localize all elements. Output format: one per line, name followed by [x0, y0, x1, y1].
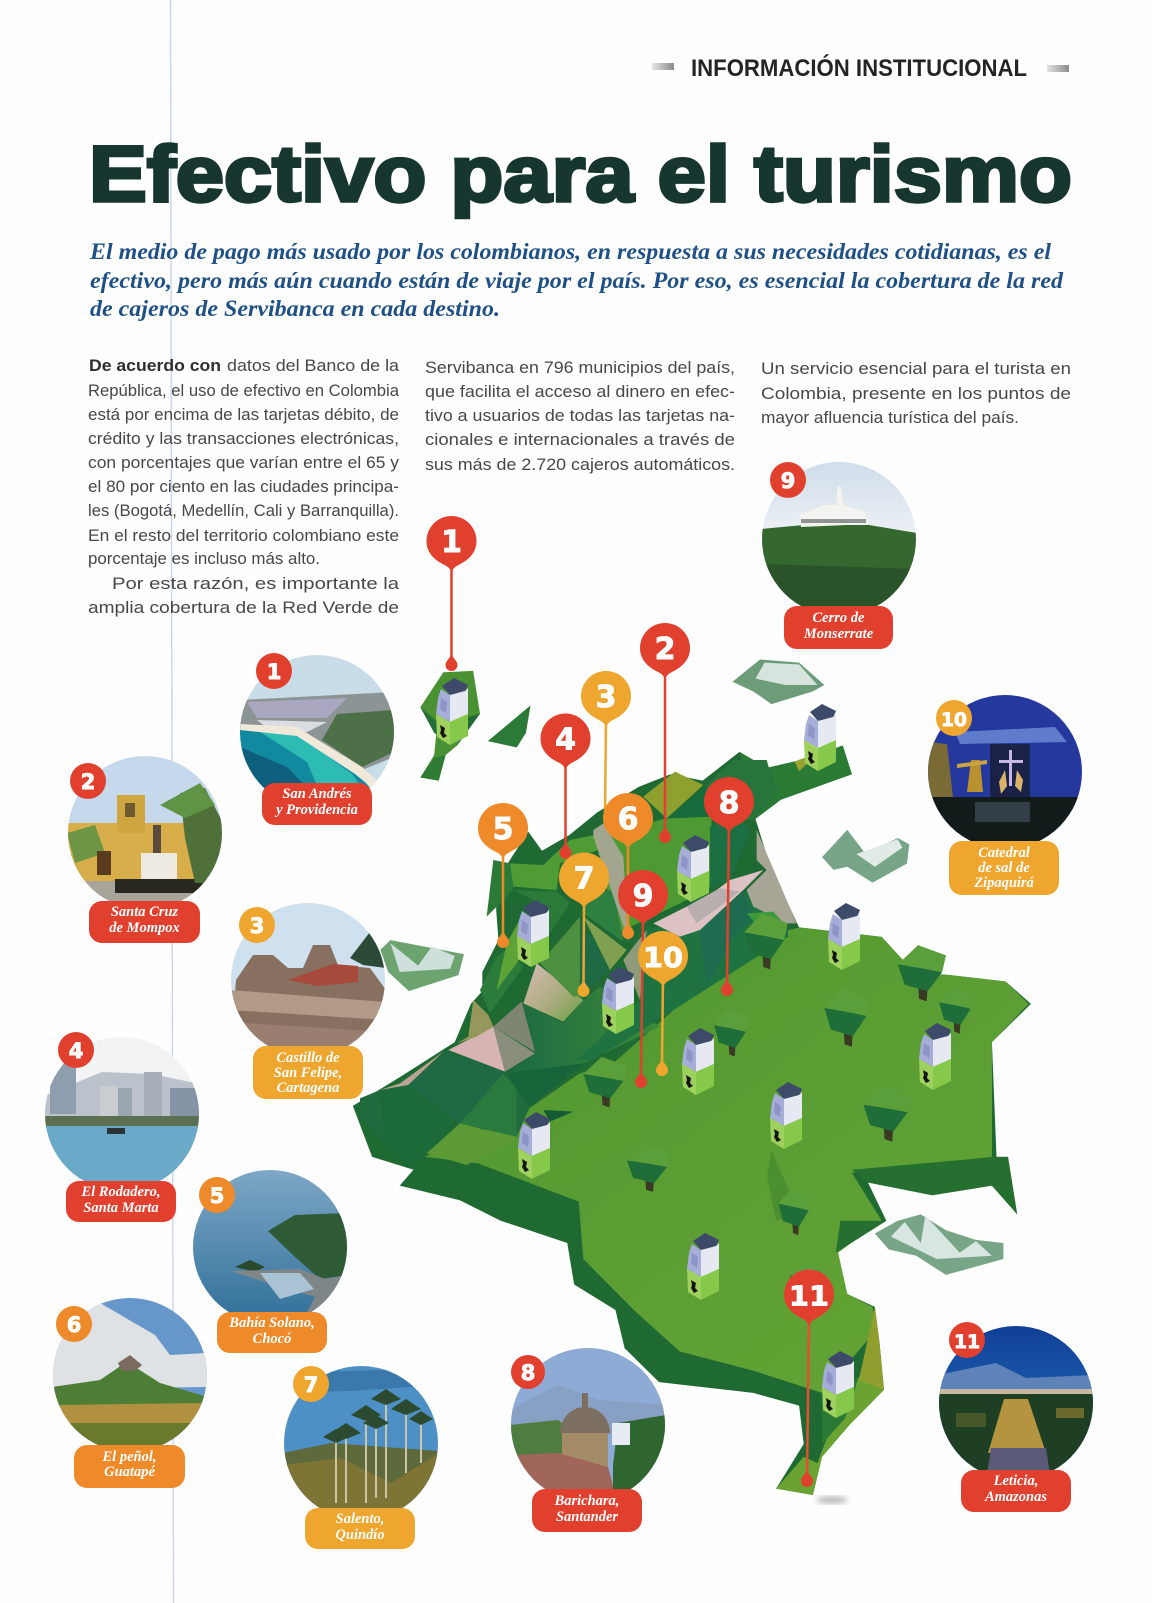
number badge: 6: [67, 1313, 81, 1337]
photo: coast: [192, 1169, 348, 1325]
label: San Felipe,: [274, 1065, 342, 1081]
destination 5: Bahía Solano: [192, 1169, 348, 1353]
photo: night city: [938, 1325, 1094, 1481]
number badge: [936, 700, 972, 736]
photo: rock: [52, 1297, 208, 1453]
title: Efectivo para el turismo: [89, 129, 1072, 218]
number badge: 2: [81, 770, 95, 794]
number badge: 5: [210, 1184, 224, 1208]
photo: wax palms: [284, 1366, 438, 1508]
map pin 6: 6: [618, 802, 638, 837]
Caribbean islands: [420, 671, 531, 781]
body column 1: porcentaje es incluso más alto.: [88, 550, 320, 568]
label: Santander: [556, 1509, 618, 1525]
photo: plaza: [67, 755, 223, 911]
label: El Rodadero,: [81, 1184, 160, 1200]
intro paragraph: [89, 239, 1064, 321]
destination 4: El Rodadero: [44, 1032, 200, 1222]
label: [66, 1181, 176, 1222]
label: Santa Cruz: [111, 904, 179, 920]
destination 8: Barichara: [510, 1347, 666, 1532]
number badge: 7: [304, 1373, 318, 1397]
label: Barichara,: [554, 1493, 619, 1509]
map pin 9: 9: [633, 879, 653, 914]
destination 2: Santa Cruz de Mompox: [67, 755, 223, 943]
map of Colombia: [353, 659, 1031, 1504]
label: [961, 1470, 1071, 1512]
map pin 10: [638, 931, 688, 1076]
trees: [583, 913, 974, 1301]
number badge: 8: [521, 1361, 535, 1385]
label: Monserrate: [803, 626, 874, 642]
destination 9: Cerro de Monserrate: [761, 461, 917, 649]
body column 3: Un servicio esencial para el turista en: [761, 360, 1071, 378]
body column 1: En el resto del territorio colombiano este: [88, 527, 399, 545]
label: [532, 1489, 642, 1532]
map pin 9: [618, 870, 668, 1088]
label: y Providencia: [274, 802, 358, 818]
map pin 11: 11: [789, 1280, 829, 1312]
number badge: [239, 907, 275, 943]
map pin 5: [478, 803, 528, 948]
number badge: 3: [250, 914, 264, 938]
photo: fortress: [230, 902, 386, 1058]
label: Castillo de: [276, 1050, 340, 1066]
intro paragraph: efectivo, pero más aún cuando están de viaje por el país. Por eso, es esencial la cobertura de la red: [90, 268, 1064, 293]
body column 1: De acuerdo con: [89, 357, 221, 375]
destination 11: Leticia: [938, 1322, 1094, 1512]
label: Zipaquirá: [973, 875, 1035, 891]
label: [74, 1445, 185, 1488]
label: Cartagena: [277, 1080, 339, 1096]
map pin 4: 4: [555, 722, 576, 758]
destination 6: El Peñol: [52, 1297, 208, 1488]
map pin 8: 8: [719, 786, 739, 821]
body column 1: Por esta razón, es importante la: [112, 575, 400, 593]
label: Amazonas: [984, 1489, 1047, 1505]
body column 3: mayor afluencia turística del país.: [761, 409, 1019, 427]
label: Salento,: [336, 1511, 384, 1527]
photo: dome: [511, 1348, 665, 1490]
label: Cerro de: [813, 610, 865, 626]
clouds: [380, 659, 1003, 1275]
map pin 1: 1: [441, 525, 462, 560]
map pin 2: [640, 623, 690, 843]
number badge: [199, 1177, 235, 1213]
label: [262, 783, 372, 825]
label: [89, 901, 200, 943]
label: Santa Marta: [83, 1200, 159, 1216]
body column 1: amplia cobertura de la Red Verde de: [88, 599, 399, 617]
destination 3: Castillo de San Felipe: [230, 902, 386, 1099]
label: Leticia,: [993, 1473, 1038, 1489]
label: El peñol,: [102, 1449, 156, 1465]
label: [217, 1312, 327, 1353]
body column 2: sus más de 2.720 cajeros automáticos.: [425, 456, 735, 474]
western Andes facets: [360, 913, 660, 1167]
destination 1: San Andrés y Providencia: [240, 653, 394, 825]
body column 1: República, el uso de efectivo en Colombia: [88, 382, 400, 400]
label: [949, 841, 1059, 895]
section header: INFORMACIÓN INSTITUCIONAL: [691, 54, 1027, 82]
map pin 4: [540, 714, 590, 859]
destination 10: Catedral de sal: [927, 694, 1083, 895]
label: San Andrés: [282, 786, 352, 802]
map pin 7: [559, 852, 609, 997]
body column 1: crédito y las transacciones electrónicas,: [88, 430, 399, 448]
label: Bahía Solano,: [228, 1315, 315, 1331]
number badge: 10: [941, 709, 967, 731]
body column 2: [425, 359, 735, 474]
intro paragraph: de cajeros de Servibanca en cada destino.: [90, 296, 500, 321]
number badge: [770, 462, 806, 498]
map pin 5: 5: [493, 812, 513, 847]
photo: salt cathedral: [927, 694, 1083, 850]
label: Chocó: [253, 1331, 291, 1347]
number badge: 11: [954, 1331, 980, 1353]
body column 2: cionales e internacionales a través de: [425, 431, 735, 449]
map pin 11: [784, 1270, 834, 1487]
body column 3: [761, 360, 1071, 427]
body column 1: con porcentajes que varían entre el 65 y: [88, 454, 400, 472]
body column 1: el 80 por ciento en las ciudades principa-: [88, 478, 399, 496]
number badge: [56, 1306, 92, 1342]
map pin 3: [581, 671, 631, 815]
label: [253, 1046, 363, 1099]
map pin 6: [603, 793, 653, 939]
map pin 3: 3: [596, 680, 616, 715]
number badge: [511, 1355, 545, 1389]
label: Quindío: [335, 1527, 385, 1543]
northern Andes facets: [487, 760, 797, 1060]
number badge: [70, 763, 106, 799]
label: [784, 606, 893, 649]
number badge: [293, 1366, 329, 1402]
number badge: [58, 1032, 94, 1068]
label: Catedral: [978, 845, 1030, 861]
body column 1: [88, 357, 400, 617]
label: Guatapé: [104, 1464, 155, 1480]
intro paragraph: El medio de pago más usado por los colombianos, en respuesta a sus necesidades cotidianas, es el: [89, 239, 1052, 264]
number badge: [949, 1322, 985, 1358]
number badge: 9: [781, 469, 795, 493]
label: de Mompox: [109, 920, 180, 936]
label: de sal de: [978, 860, 1030, 876]
photo: bay: [44, 1036, 200, 1192]
body column 3: Colombia, presente en los puntos de: [761, 385, 1071, 403]
label: [305, 1508, 415, 1549]
body column 1: está por encima de las tarjetas débito, de: [88, 406, 399, 424]
body column 1: les (Bogotá, Medellín, Cali y Barranquilla).: [88, 502, 399, 520]
body column 2: que facilita el acceso al dinero en efec-: [425, 383, 735, 401]
map pin 8: [704, 777, 754, 996]
number badge: 1: [267, 660, 281, 684]
body column 1: datos del Banco de la: [227, 357, 400, 375]
cash machines: [436, 678, 951, 1418]
map pin 7: 7: [574, 862, 594, 896]
number badge: [256, 653, 292, 689]
body column 2: Servibanca en 796 municipios del país,: [425, 359, 735, 377]
map silhouette and lowlands: [353, 746, 1031, 1495]
map pin 2: 2: [655, 632, 675, 667]
number badge: 4: [69, 1039, 83, 1063]
body column 2: tivo a usuarios de todas las tarjetas na-: [425, 407, 735, 425]
photo: hill church: [761, 461, 917, 617]
photo: beach: [240, 655, 394, 788]
map pin 10: 10: [643, 941, 683, 974]
map pin 1: [426, 516, 476, 671]
destination 7: Salento: [283, 1365, 439, 1549]
